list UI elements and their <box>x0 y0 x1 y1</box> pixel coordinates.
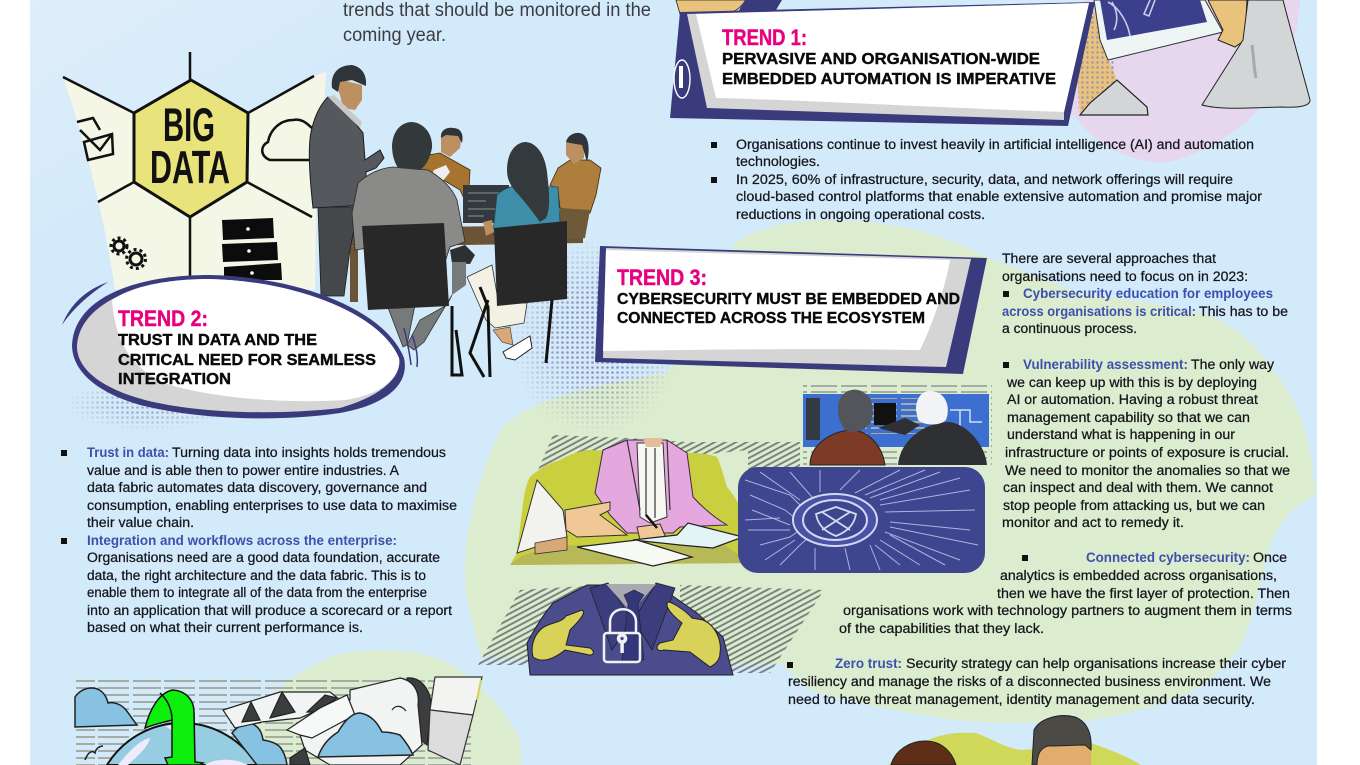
trend 1 heading <box>722 51 1056 88</box>
text block: cybersecurity approaches: The only way <box>1191 357 1274 372</box>
trend 3 heading <box>617 291 960 327</box>
text block: cybersecurity approaches: We need to monitor the anomalies so that we <box>1005 463 1290 478</box>
text block: trend 2 bullets <box>61 445 457 635</box>
text block: trend 2 bullets: Integration and workflows across the enterprise: <box>87 533 397 548</box>
illustration: top right tablet and hands <box>676 0 1310 115</box>
hatch <box>538 435 800 500</box>
text block: trend 2 bullets: consumption, enabling enterprises to use data to maximise <box>87 498 457 513</box>
text block: trend 2 bullets: data, the right architecture and the data fabric. This is to <box>87 568 426 583</box>
right glove <box>657 602 720 667</box>
jacket <box>595 440 727 533</box>
pointing hand <box>565 502 627 537</box>
icon: figure badge <box>674 60 690 98</box>
olive background <box>510 450 750 565</box>
folder <box>577 540 692 566</box>
table <box>342 225 583 302</box>
trend 1 heading: PERVASIVE AND ORGANISATION-WIDE <box>722 51 1040 68</box>
halftone dots: trend 3 <box>516 246 668 428</box>
illustration: lock and gloves <box>478 583 824 675</box>
text block: cybersecurity approaches: Connected cybersecurity: <box>1086 550 1250 565</box>
text block: trend 2 bullets: Trust in data: <box>87 445 169 460</box>
text block: trend 2 bullets: value and is able then to power entire industries. A <box>87 463 399 478</box>
illustration: meeting team <box>309 65 601 377</box>
text block: cybersecurity approaches: understand what is happening in our <box>1007 427 1236 442</box>
text block: cybersecurity approaches: Cybersecurity education for employees <box>1023 286 1273 301</box>
text block: trend 1 bullets <box>711 137 1263 222</box>
writing hand <box>637 524 667 540</box>
shirt <box>637 443 667 523</box>
trend 3 heading: CONNECTED ACROSS THE ECOSYSTEM <box>617 310 925 327</box>
text block: trend 1 bullets: technologies. <box>736 154 820 169</box>
illustration: bottom right people <box>889 716 1141 765</box>
text block: cybersecurity approaches: need to have threat management, identity management and data security. <box>788 692 1255 707</box>
trend 1 heading: EMBEDDED AUTOMATION IS IMPERATIVE <box>722 71 1056 88</box>
bird <box>85 746 103 760</box>
arrow <box>145 690 203 765</box>
chair left <box>362 223 462 375</box>
text block: trend 2 bullets: Organisations need are a good data foundation, accurate <box>87 550 440 565</box>
text block: cybersecurity approaches: monitor and act to remedy it. <box>1002 515 1184 530</box>
suit <box>527 585 733 675</box>
text block: cybersecurity approaches: Security strategy can help organisations increase their cyber <box>906 656 1287 671</box>
trend 3 heading: CYBERSECURITY MUST BE EMBEDDED AND <box>617 291 960 308</box>
trend 2 heading: CRITICAL NEED FOR SEAMLESS <box>118 352 376 369</box>
globe <box>107 723 257 765</box>
right hand <box>1208 0 1247 47</box>
text block: cybersecurity approaches: Vulnerability assessment: <box>1023 357 1188 372</box>
text block: trend 1 bullets: In 2025, 60% of infrastructure, security, data, and network offerings will require <box>736 172 1233 187</box>
illustration: monitoring screen <box>803 385 992 465</box>
text block: cybersecurity approaches: can inspect and deal with them. We cannot <box>1003 480 1273 495</box>
text block: cybersecurity approaches: AI or automation. Having a robust threat <box>1007 392 1258 407</box>
text block: trend 2 bullets: based on what their current performance is. <box>87 620 363 635</box>
icon: padlock <box>604 609 640 662</box>
hatch <box>478 585 824 673</box>
illustration: big data hexagons <box>63 52 326 290</box>
text block: cybersecurity approaches: Zero trust: <box>835 656 902 671</box>
text block: cybersecurity approaches: we can keep up with this is by deploying <box>1006 375 1257 390</box>
trend 1 label: TREND 1: <box>722 25 807 50</box>
table <box>510 545 750 565</box>
chair right <box>470 221 567 377</box>
left sleeve <box>1080 80 1148 115</box>
icon: shield <box>816 507 856 536</box>
text block: cybersecurity approaches: resiliency and manage the risks of a disconnected business environment. We <box>788 674 1271 689</box>
icon: envelopes <box>77 118 113 160</box>
background blob: green robot <box>225 650 522 765</box>
text block: cybersecurity approaches: This has to be <box>1199 304 1288 319</box>
standing man <box>309 65 384 296</box>
text block: cybersecurity approaches: infrastructure or points of exposure is crucial. <box>1005 445 1289 460</box>
trend 2 heading: TRUST IN DATA AND THE <box>118 332 317 349</box>
text block: cybersecurity approaches: organisations work with technology partners to augment them in terms <box>843 603 1292 618</box>
right sleeve <box>1202 0 1310 108</box>
icon: cloud <box>262 120 312 160</box>
text block: trend 2 bullets: their value chain. <box>87 515 194 530</box>
illustration: signing documents <box>510 435 800 566</box>
icon: server drawers <box>222 218 282 280</box>
text block: cybersecurity approaches: across organisations is critical: <box>1002 304 1196 319</box>
text block: cybersecurity approaches: of the capabilities that they lack. <box>839 621 1044 636</box>
intro text: trends that should be monitored in the <box>343 0 651 21</box>
text block: trend 2 bullets: enable them to integrate all of the data from the enterprise <box>87 585 427 600</box>
seated woman back view <box>483 142 560 244</box>
text block: cybersecurity approaches: then we have the first layer of protection. Then <box>997 586 1290 601</box>
background blob: lilac <box>852 0 1300 163</box>
halftone dots: trend 2 <box>72 387 217 428</box>
seated man back view <box>352 122 475 295</box>
intro text <box>343 0 651 46</box>
text block: trend 2 bullets: data fabric automates data discovery, governance and <box>87 480 427 495</box>
text block: cybersecurity approaches: a continuous process. <box>1002 321 1137 336</box>
illustration: circuit shield <box>738 467 985 573</box>
text block: trend 2 bullets: Turning data into insights holds tremendous <box>172 445 446 460</box>
open papers <box>633 523 743 548</box>
laptop <box>463 185 509 223</box>
text block: cybersecurity approaches <box>787 251 1292 707</box>
cloud middle <box>232 723 287 765</box>
text block: trend 1 bullets: Organisations continue to invest heavily in artificial intelligence (AI) and automation <box>736 137 1254 152</box>
cloud right <box>318 713 413 757</box>
trend 3 label: TREND 3: <box>617 265 707 290</box>
intro text: coming year. <box>343 25 446 46</box>
panel: trend 2 ellipse <box>62 275 417 418</box>
text block: cybersecurity approaches: There are several approaches that <box>1002 251 1216 266</box>
left glove <box>532 610 593 660</box>
trend 2 heading: INTEGRATION <box>118 371 231 388</box>
trend 2 heading <box>118 332 376 388</box>
trend 2 label: TREND 2: <box>118 306 208 331</box>
big data label: DATA <box>150 141 230 193</box>
background blob: green cybersecurity <box>465 220 1317 723</box>
panel: trend 1 banner <box>670 2 1095 126</box>
legs <box>387 265 532 360</box>
icon: gears <box>111 238 146 268</box>
text block: trend 1 bullets: cloud-based control platforms that enable extensive automation and promise major <box>736 189 1263 204</box>
text block: cybersecurity approaches: management capability so that we can <box>1007 410 1250 425</box>
robot base box <box>430 677 482 715</box>
sleeve <box>517 480 567 553</box>
text block: trend 2 bullets: into an application that will produce a scorecard or a report <box>87 603 452 618</box>
brown jacket man <box>418 128 470 207</box>
big data label: BIG <box>163 98 215 151</box>
text block: cybersecurity approaches: analytics is embedded across organisations, <box>1000 568 1277 583</box>
robot arm <box>223 678 431 765</box>
brown jacket woman <box>550 133 601 240</box>
text block: cybersecurity approaches: stop people from attacking us, but we can <box>1003 498 1265 513</box>
panel: trend 3 banner <box>595 246 987 374</box>
text block: trend 1 bullets: reductions in ongoing operational costs. <box>736 207 985 222</box>
text block: cybersecurity approaches: organisations need to focus on in 2023: <box>1002 269 1248 284</box>
illustration: globe and robot hand <box>75 675 482 765</box>
tablet <box>1094 0 1223 60</box>
top left hand <box>676 0 746 14</box>
cloud left <box>75 688 137 727</box>
big data label <box>150 98 230 193</box>
left arm <box>1076 8 1117 115</box>
text block: cybersecurity approaches: Once <box>1253 550 1287 565</box>
